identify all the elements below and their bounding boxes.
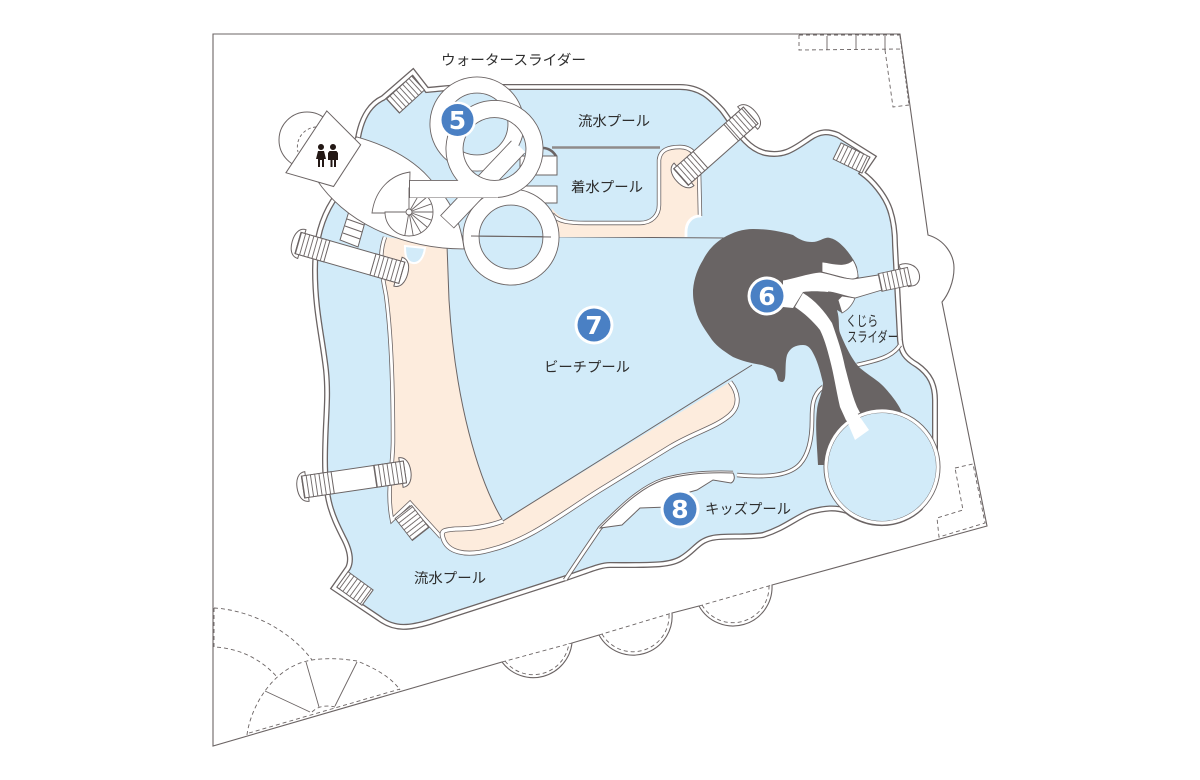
icon: man [328,144,338,167]
bridge connector to building [340,208,367,247]
stairs: bottom left [337,572,373,605]
marker 6: 6 [758,282,776,311]
label: beach pool: ビーチプール [544,359,630,376]
label: kids pool: キッズプール [705,501,791,518]
slide tower building [318,138,463,248]
drop-shaped inlet [405,246,425,263]
label: water slider: ウォータースライダー [441,52,586,69]
label: lazy river bottom: 流水プール [414,570,486,587]
marker 8 [660,490,700,528]
dashed fan terrace: bottom left [214,608,400,735]
slide loop: middle with chute [409,109,534,198]
bridge: lower left [295,456,413,503]
whale slide: white head pieces [822,260,858,313]
marker 7 [574,306,614,344]
spiral stair [372,172,433,236]
dashed terrace: right [937,464,985,537]
label: landing pool: 着水プール [571,179,643,196]
slide loop: lower [471,197,551,277]
slide diagonal [447,146,519,222]
marker 5: 5 [449,106,466,135]
slide landing platforms [520,156,557,203]
stairs: top right [833,143,870,173]
label: lazy river top: 流水プール [578,113,650,130]
bridge: upper left [288,227,412,289]
icon: woman [316,144,326,167]
beach: main sand [381,237,503,540]
stairs: top left [387,76,424,113]
dashed terrace: top right [799,35,909,107]
marker 7: 7 [585,311,603,340]
marker 6 [748,276,786,316]
restroom [288,113,359,185]
label: whale slider: スライダー [847,329,898,346]
whale slide: stair end [877,261,921,292]
beach: sand spit [442,365,752,553]
label: whale slider: くじら [846,314,878,330]
pool water with double wall [315,72,935,627]
whale slide body [693,229,903,465]
whale slide: descending chute [795,293,869,440]
restroom backing circle [279,112,335,168]
kids pool island [600,473,734,528]
circular plunge pool [826,407,938,523]
slide loop: upper [438,85,516,163]
stairs: beach [395,506,429,540]
marker 5 [439,102,476,138]
beach: landing pool side [552,147,700,237]
walls: whale pool and kids pool [565,345,900,580]
water slide structure [409,85,557,277]
whale slide: horizontal chute [783,272,882,308]
dashed semicircle terraces: bottom [502,585,772,675]
site boundary [213,34,987,746]
marker 8: 8 [671,495,689,524]
label: whale slider [846,314,898,346]
pool divider line [462,148,725,238]
bridge: top right [667,100,765,192]
